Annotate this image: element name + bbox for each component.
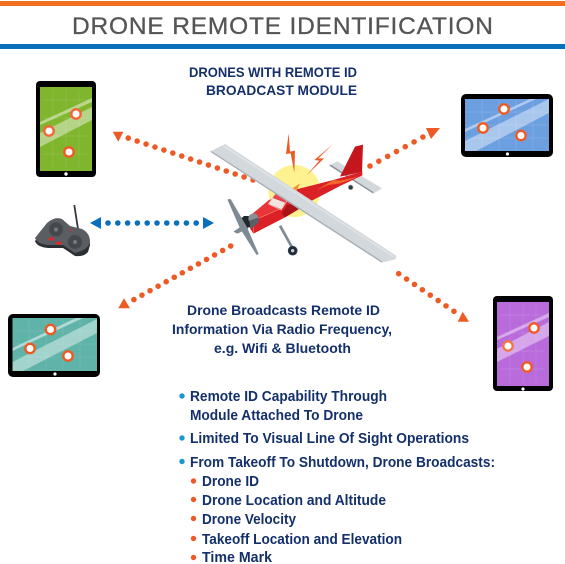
heading: drones with remote ID: BROADCAST MODULE [206,82,357,98]
bullet list: capabilities [179,389,495,564]
text: broadcast description [172,302,392,356]
arrow: orange dotted, to green tablet [113,132,253,180]
text: broadcast description: Information Via Radio Frequency, [172,321,392,337]
sub-bullet: velocity: Drone Velocity [202,512,296,528]
header: blue bar [0,44,565,49]
engine [240,213,259,230]
tablet: green, top left [36,81,96,177]
lightning bolts [286,133,333,176]
bullet: module [179,389,387,424]
bullet: module: Remote ID Capability Through [190,389,387,405]
fuselage shadow [282,202,310,217]
illustration: airplane drone [210,133,397,263]
bullet: broadcasts: From Takeoff To Shutdown, Drone Broadcasts: [190,455,495,471]
text: broadcast description: e.g. Wifi & Bluetooth [214,340,351,356]
arrow: blue dotted, double headed [90,217,214,229]
tablet: teal, bottom left [8,314,100,377]
arrow: orange dotted, to teal tablet [118,246,231,308]
main wing [210,144,397,263]
tail stabilizer [329,161,382,194]
tablet: purple, bottom right [493,296,553,391]
heading: drones with remote ID: DRONES WITH REMOTE ID [189,64,357,80]
icon: remote controller [35,205,90,256]
propeller [227,199,259,255]
fuselage side seam [253,207,283,234]
header: orange bar [0,1,565,6]
heading: drones with remote ID [189,64,357,98]
text: broadcast description: Drone Broadcasts Remote ID [187,302,380,318]
tablet: blue, top right [461,94,553,157]
tail fin [340,145,363,177]
bullet: visual line of sight: Limited To Visual Line Of Sight Operations [190,431,469,447]
sub-bullet: takeoff location: Takeoff Location and Elevation [202,532,402,548]
title: DRONE REMOTE IDENTIFICATION [72,13,493,40]
rear wheel [348,185,353,190]
arrow: orange dotted, to purple tablet [399,274,469,322]
arrow: orange dotted, to blue tablet [370,128,440,166]
fuselage [245,172,362,234]
sub-bullet: location and altitude: Drone Location and Altitude [202,493,386,509]
fuselage top highlight [248,201,282,221]
cockpit flame [287,183,300,193]
cockpit [268,191,294,210]
sub-bullet: drone ID: Drone ID [202,474,259,490]
sun glow [268,165,320,217]
fuselage flame [317,177,359,190]
landing gear [280,226,292,247]
bullet: module: Module Attached To Drone [190,408,363,424]
